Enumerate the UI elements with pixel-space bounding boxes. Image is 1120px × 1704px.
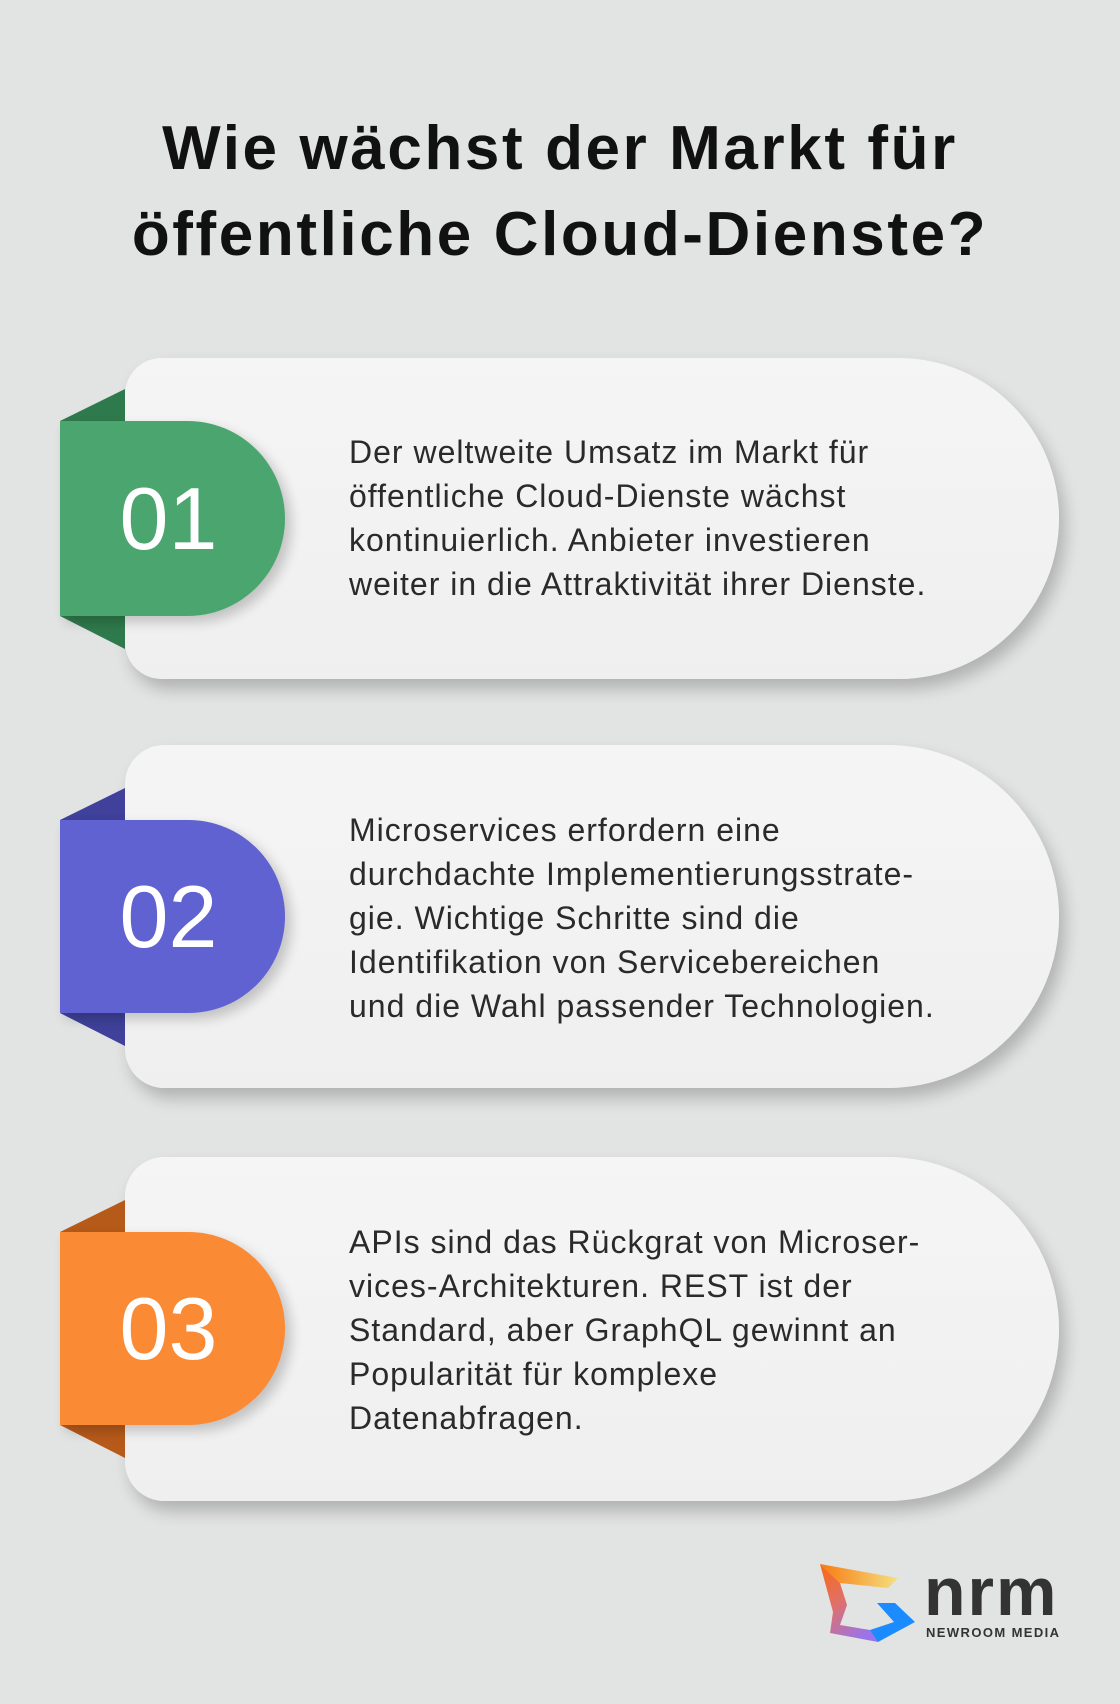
text 02 <box>349 812 935 1024</box>
text 03: Standard, aber GraphQL gewinnt an <box>349 1312 897 1348</box>
badge 01 <box>60 421 285 616</box>
text 03: Datenabfragen. <box>349 1400 584 1436</box>
logo <box>820 1554 1060 1642</box>
text 03: APIs sind das Rückgrat von Microser- <box>349 1224 920 1260</box>
text 02: Microservices erfordern eine <box>349 812 781 848</box>
badge 01: 01 <box>120 468 217 568</box>
text 01: kontinuierlich. Anbieter investieren <box>349 522 871 558</box>
badge 02: 02 <box>120 866 217 966</box>
text 01: weiter in die Attraktivität ihrer Dienste. <box>349 566 926 602</box>
fold 02 <box>60 788 125 1046</box>
text 02: Identifikation von Servicebereichen <box>349 944 880 980</box>
text 03: Popularität für komplexe <box>349 1356 718 1392</box>
text 03: vices-Architekturen. REST ist der <box>349 1268 853 1304</box>
title: Wie wächst der Markt für <box>162 114 958 183</box>
panel: step 01 <box>60 358 1072 696</box>
badge 03: 03 <box>120 1278 217 1378</box>
text 01 <box>349 434 926 602</box>
panel: step 02 <box>60 745 1072 1106</box>
card 01 <box>125 358 1059 679</box>
text 01: öffentliche Cloud-Dienste wächst <box>349 478 846 514</box>
text 02: durchdachte Implementierungsstrate- <box>349 856 914 892</box>
panel: step 03 <box>60 1157 1072 1518</box>
fold 01 <box>60 389 125 649</box>
badge 03 <box>60 1232 285 1425</box>
logo: NEWROOM MEDIA <box>926 1625 1060 1640</box>
icon: logo mark <box>820 1564 915 1642</box>
text 01: Der weltweite Umsatz im Markt für <box>349 434 869 470</box>
card 02 <box>125 745 1059 1088</box>
text 03 <box>349 1224 920 1436</box>
logo text: nrm <box>924 1554 1058 1630</box>
fold 03 <box>60 1200 125 1458</box>
text 02: und die Wahl passender Technologien. <box>349 988 935 1024</box>
card 03 <box>125 1157 1059 1501</box>
title: öffentliche Cloud-Dienste? <box>132 200 988 269</box>
title <box>132 114 988 269</box>
badge 02 <box>60 820 285 1013</box>
text 02: gie. Wichtige Schritte sind die <box>349 900 800 936</box>
